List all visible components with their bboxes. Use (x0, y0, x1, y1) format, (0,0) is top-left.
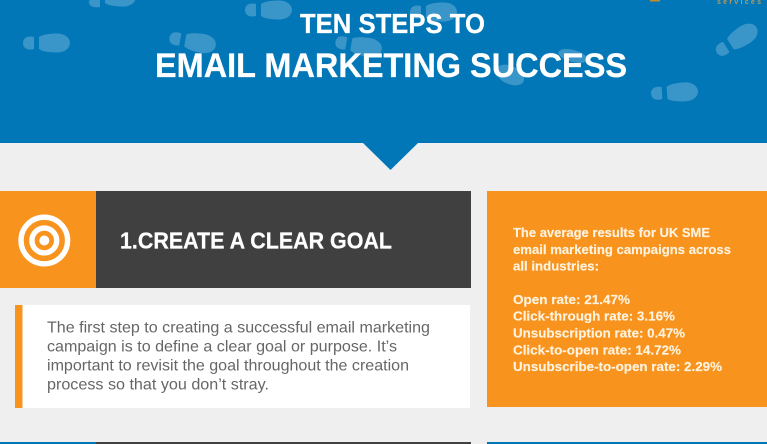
average results text: Unsubscribe-to-open rate: 2.29% (513, 359, 722, 374)
average results text: email marketing campaigns across (513, 242, 731, 257)
description text (47, 320, 430, 394)
header banner (0, 0, 767, 170)
next step panels (0, 442, 767, 444)
average results text: Unsubscription rate: 0.47% (513, 326, 685, 340)
average results text: Open rate: 21.47% (513, 292, 630, 307)
description text: process so that you don’t stray. (47, 376, 269, 394)
title (155, 8, 627, 85)
average results text: all industries: (513, 258, 599, 274)
panel: step 1 heading (0, 191, 471, 288)
description text: important to revisit the goal throughout the creation (47, 358, 409, 374)
logo fragment (650, 0, 761, 6)
average results text (513, 225, 731, 374)
step 1 heading text: 1.CREATE A CLEAR GOAL (120, 228, 392, 254)
title: EMAIL MARKETING SUCCESS (155, 47, 627, 85)
description text: campaign is to define a clear goal or purpose. It’s (47, 338, 397, 356)
average results text: The average results for UK SME (513, 225, 710, 240)
description text: The first step to creating a successful email marketing (47, 320, 430, 336)
title: TEN STEPS TO (300, 8, 485, 39)
panel: step 1 description (15, 305, 470, 408)
panel: average results (487, 191, 767, 407)
average results text: Click-through rate: 3.16% (513, 308, 675, 324)
icon: footprints (23, 0, 762, 103)
average results text: Click-to-open rate: 14.72% (513, 342, 681, 358)
icon: target (21, 217, 68, 264)
